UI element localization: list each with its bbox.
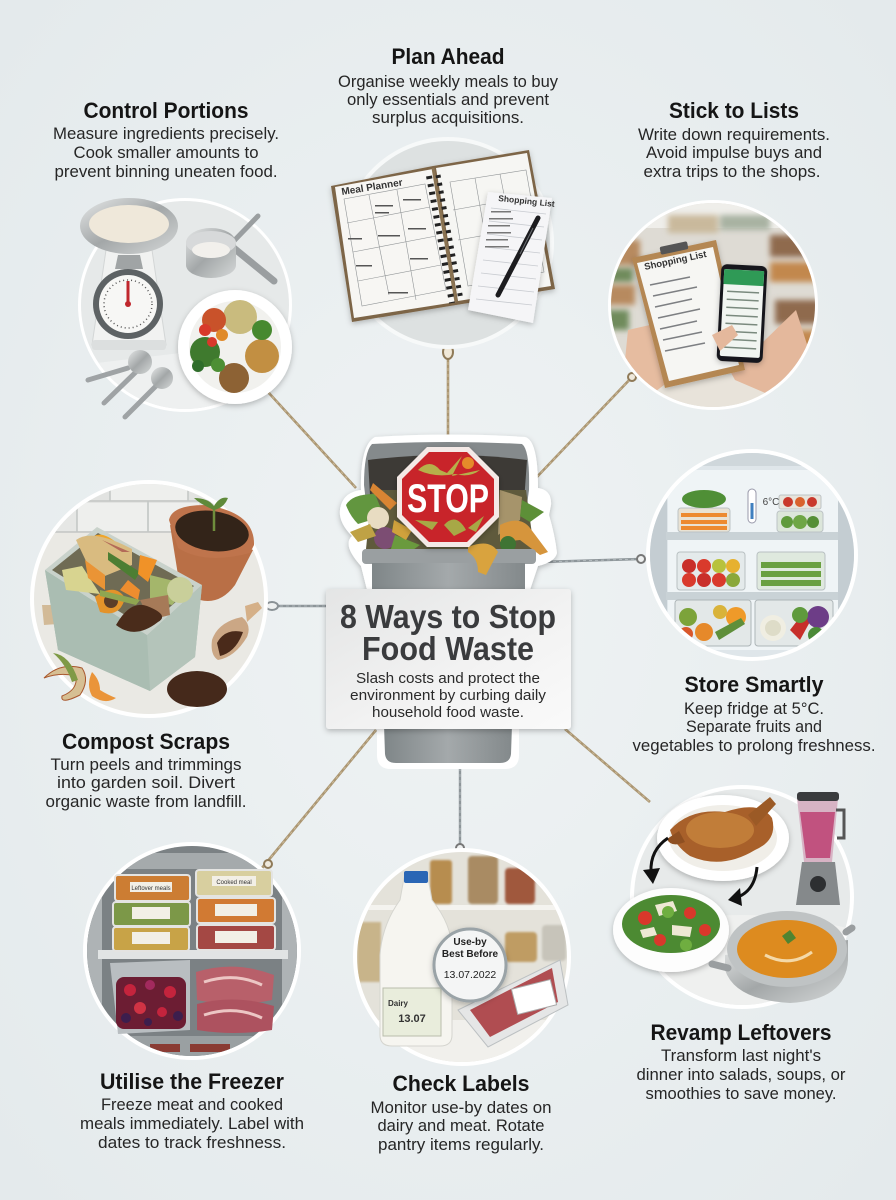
description: Separate fruits and (686, 718, 822, 736)
description: Organise weekly meals to buy (338, 73, 559, 91)
description: Cook smaller amounts to (74, 144, 258, 162)
description: dairy and meat. Rotate (378, 1117, 544, 1135)
meat tray (458, 960, 568, 1047)
description: Transform last night's (661, 1047, 821, 1065)
description: dinner into salads, soups, or (636, 1066, 846, 1084)
description: pantry items regularly. (378, 1136, 544, 1154)
circle photo: planner and list (331, 137, 555, 349)
stop sign (397, 447, 499, 547)
heading: Compost Scraps (62, 729, 230, 754)
panel: compost scraps (30, 480, 270, 811)
description: organic waste from landfill. (46, 793, 246, 811)
bin lower body (384, 725, 512, 763)
description (80, 1096, 304, 1152)
circle photo: planner and list: Meal Planner (341, 177, 404, 198)
measuring spoons (88, 368, 160, 417)
soup pot (712, 911, 852, 1003)
description: extra trips to the shops. (644, 163, 820, 181)
panel: utilise the freezer (80, 840, 305, 1152)
bin lid (364, 442, 529, 520)
subtitle: Slash costs and protect the (356, 670, 540, 687)
label magnifier bubble: Use-by (453, 937, 487, 948)
milk jug: Dairy (388, 999, 409, 1008)
main title (340, 598, 556, 667)
heading: Control Portions (84, 98, 248, 123)
main title: 8 Ways to Stop (340, 598, 556, 635)
bags of meat (196, 967, 274, 1033)
milk jug (380, 871, 452, 1046)
middle shelf produce (677, 552, 825, 590)
bin rim (362, 549, 536, 564)
top shelf produce (678, 489, 823, 532)
panel: control portions (53, 98, 295, 417)
subtitle: household food waste. (372, 704, 524, 721)
stacked containers: Cooked meal (216, 880, 252, 886)
top shelf produce: 6°C (763, 497, 779, 508)
heading: Revamp Leftovers (650, 1020, 832, 1045)
description: only essentials and prevent (347, 91, 549, 109)
heading: Utilise the Freezer (100, 1069, 284, 1094)
central bin and title (326, 434, 571, 769)
crisper drawers (675, 600, 833, 646)
description: Write down requirements. (638, 126, 830, 144)
circle photo: freezer contents (80, 840, 305, 1066)
panel: plan ahead (331, 44, 559, 349)
clipboard (632, 240, 745, 388)
panel: check labels (350, 848, 575, 1154)
circle photo: supermarket list and phone (605, 198, 821, 415)
description: Avoid impulse buys and (646, 144, 822, 162)
description: smoothies to save money. (646, 1085, 836, 1103)
description: meals immediately. Label with (80, 1115, 304, 1133)
compost caddy (45, 527, 202, 691)
description (46, 756, 246, 811)
label magnifier bubble (434, 929, 506, 1001)
description: Keep fridge at 5°C. (684, 700, 824, 718)
circle photo: leftovers reused (613, 785, 855, 1010)
milk jug: 13.07 (398, 1013, 426, 1025)
stacked containers: Leftover meals (131, 886, 171, 892)
description: surplus acquisitions. (372, 109, 524, 127)
description: Turn peels and trimmings (50, 756, 242, 774)
connector ropes (262, 345, 650, 868)
arrow: chicken to soup (738, 867, 757, 897)
description: dates to track freshness. (98, 1134, 286, 1152)
hands (625, 325, 664, 390)
subtitle (350, 670, 547, 721)
heading: Store Smartly (684, 672, 824, 697)
heading: Stick to Lists (669, 98, 799, 123)
description: Monitor use-by dates on (370, 1099, 552, 1117)
bin body (372, 563, 525, 592)
circle photo: organised fridge (645, 449, 860, 665)
scoop of soil (212, 602, 262, 660)
sticker outline (340, 434, 557, 590)
circle photo: scale, cups and plate (75, 195, 295, 417)
description (338, 73, 559, 127)
description: prevent binning uneaten food. (54, 163, 278, 181)
description: vegetables to prolong freshness. (632, 737, 876, 755)
clipboard: Shopping List (643, 249, 708, 273)
circle photo: milk, label and meat (350, 848, 575, 1073)
description (636, 1047, 846, 1103)
arrowhead right (728, 888, 742, 906)
salad bowl (613, 888, 729, 972)
soil pile (167, 671, 227, 707)
main title: Food Waste (362, 630, 534, 667)
label magnifier bubble: Best Before (442, 949, 498, 960)
food spilling from bin (346, 483, 548, 555)
label magnifier bubble: 13.07.2022 (444, 969, 496, 981)
panel: revamp leftovers (613, 785, 855, 1103)
handle (42, 605, 85, 625)
terracotta pot (169, 498, 254, 601)
arrow: chicken to salad (651, 838, 668, 872)
panel: store smartly (632, 449, 876, 755)
roast chicken plate (657, 795, 789, 881)
description (632, 700, 876, 755)
plate of vegetables and lentils (178, 290, 292, 404)
stacked containers (113, 870, 275, 951)
circle photo: compost caddy and pot (30, 480, 270, 722)
description (53, 125, 279, 181)
peels (44, 653, 116, 701)
arrowhead left (643, 868, 660, 884)
description (370, 1099, 552, 1154)
heading: Plan Ahead (392, 44, 504, 69)
subtitle: environment by curbing daily (350, 687, 547, 704)
stop word: STOP (407, 477, 489, 521)
description: Measure ingredients precisely. (53, 125, 279, 143)
title card (326, 589, 571, 729)
heading: Check Labels (392, 1071, 530, 1096)
shopping list note: Shopping List (498, 193, 555, 209)
food spill on rim (468, 543, 498, 575)
shopping list note (468, 192, 555, 323)
description (638, 126, 830, 181)
blender (796, 792, 844, 905)
description: into garden soil. Divert (57, 774, 235, 792)
bag of berries (110, 960, 190, 1034)
phone (716, 264, 767, 363)
white outline below panel (377, 725, 519, 769)
description: Freeze meat and cooked (101, 1096, 283, 1114)
panel: stick to lists (605, 98, 830, 415)
